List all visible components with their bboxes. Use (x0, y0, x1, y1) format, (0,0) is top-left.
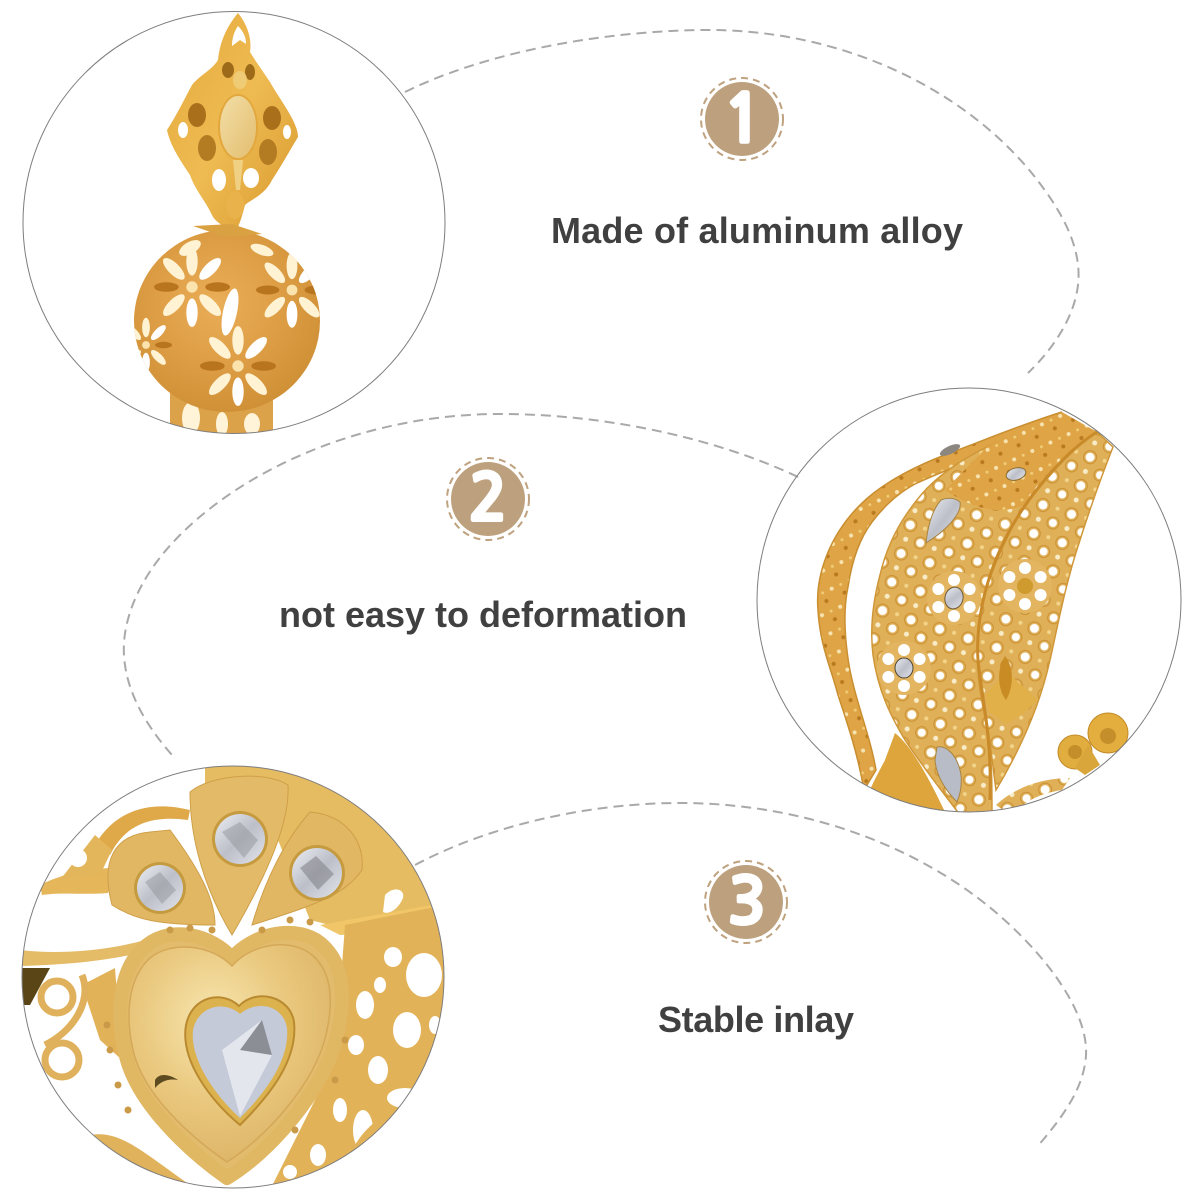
gold flower (998, 559, 1052, 613)
filigree ball (134, 232, 320, 412)
upper right hole (383, 889, 403, 913)
small gem on back band (940, 444, 960, 456)
teardrop rhinestone top (926, 498, 960, 543)
right filigree (270, 905, 450, 1190)
main left panel (872, 425, 1097, 815)
left dark sliver (22, 968, 50, 1005)
top gold behind crown (205, 766, 431, 924)
lower left gold (94, 1134, 186, 1182)
badge 1: 1 (723, 86, 763, 152)
heading: made of aluminum alloy: Made of aluminum alloy (551, 210, 963, 251)
heading: not easy to deformation: not easy to deformation (279, 594, 687, 635)
badge 3 (705, 861, 787, 943)
teardrop rhinestone bottom (935, 747, 961, 802)
circle outline (23, 12, 445, 434)
badge 2: 2 (469, 466, 507, 530)
photo: pendant and filigree ball (134, 13, 320, 433)
heart inner (129, 945, 330, 1162)
tassel (170, 393, 273, 433)
heart beads (104, 916, 348, 1134)
ornate plate (167, 13, 298, 232)
small flowers lower right (1058, 713, 1128, 775)
upper left struts (40, 806, 190, 895)
heart highlight (155, 1075, 178, 1088)
right panel (977, 432, 1113, 790)
dashed connector 3 (415, 803, 1086, 1147)
lower band (996, 778, 1070, 809)
upper dense area (945, 412, 1097, 510)
flowers around stones (877, 571, 981, 695)
crown shields (108, 776, 362, 935)
spike ornament (985, 656, 1038, 724)
badge 1 (701, 78, 783, 160)
center rib (978, 432, 1097, 800)
dashed connector 1 (405, 30, 1079, 373)
ball flowers (134, 240, 320, 406)
left arc band (20, 940, 145, 966)
left rings (41, 975, 85, 1077)
panel: pendant photo circle (23, 12, 445, 436)
upper right highlight (320, 906, 432, 935)
badge 2 (447, 458, 529, 540)
crown rhinestones (134, 811, 345, 914)
photo: heart with rhinestones (20, 760, 450, 1190)
photo: curved filigree crown leaves (818, 412, 1128, 815)
dashed connector 2 (124, 414, 798, 755)
heart rhinestone (185, 996, 294, 1125)
ball cap (193, 224, 262, 234)
lower left ornaments (871, 733, 944, 810)
circle outline (22, 766, 444, 1188)
badge 3: 3 (728, 870, 766, 934)
circle outline (757, 388, 1181, 812)
panel: heart and gems photo circle (20, 760, 450, 1190)
gold flower centre (1017, 578, 1033, 594)
heart outer border (120, 933, 342, 1178)
panel: leaf filigree photo circle (757, 388, 1181, 815)
back band (818, 412, 1062, 790)
left filigree wedge (87, 968, 120, 1058)
small rhinestones (895, 466, 1027, 678)
heading: stable inlay: Stable inlay (658, 999, 854, 1040)
